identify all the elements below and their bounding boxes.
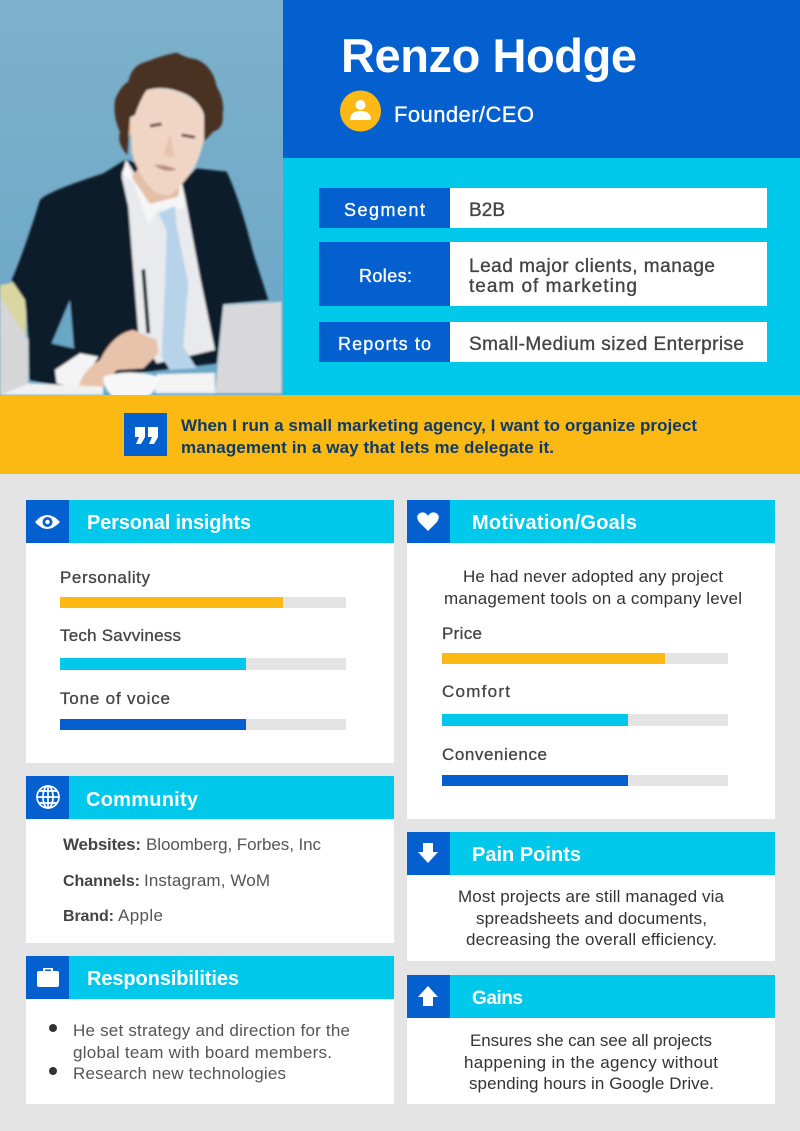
bar: personality [60,568,346,608]
panel: responsibilities [26,956,394,1104]
name: Renzo Hodge [341,29,637,82]
bulleted list: Research new technologies [73,1064,286,1083]
description [464,1031,718,1093]
text: channels: Channels: [63,873,140,890]
row: roles: Roles: [359,266,412,286]
row: reports to: Reports to [338,334,431,354]
row: roles: Lead major clients, manage [469,256,715,277]
panel: gains [407,975,775,1104]
text: channels [63,871,270,890]
icon: up arrow [418,986,438,1006]
quote band: management in a way that lets me delegate it. [181,438,554,457]
description [458,887,725,949]
bulleted list: global team with board members. [73,1043,332,1062]
bulleted list: He set strategy and direction for the [73,1021,350,1040]
icon: globe [37,786,59,808]
panel: community [26,776,394,943]
text: brand: Brand: [63,908,114,925]
bar: tech savviness [60,626,346,670]
panel: profile details [283,158,800,395]
row: segment: B2B [469,200,505,221]
bar: personality: Personality [60,568,150,587]
description: Most projects are still managed via [458,887,725,906]
panel: pain points [407,832,775,961]
heading: Responsibilities [87,968,239,990]
heading: Gains [472,988,523,1009]
icon: person badge [340,90,381,132]
description: decreasing the overall efficiency. [466,930,717,949]
bar: tone of voice [60,689,346,730]
panel: personal insights [26,500,394,763]
text: websites: Bloomberg, Forbes, Inc [146,835,322,854]
bulleted list [49,1021,350,1083]
description: spreadsheets and documents, [476,909,707,928]
bar: convenience: Convenience [442,745,547,764]
bar: price [442,624,728,664]
icon: briefcase [37,968,59,987]
row: segment: Segment [344,200,425,220]
text: websites: Websites: [63,835,141,854]
bar: price: Price [442,624,482,643]
heading: Motivation/Goals [472,512,637,534]
text: brand: Apple [118,906,163,925]
role: Founder/CEO [394,102,534,127]
icon: quotation marks [124,413,167,456]
icon: heart [417,512,439,531]
row: roles [319,242,767,306]
bar: convenience [442,745,728,786]
bar: tech savviness: Tech Savviness [60,626,181,645]
heading: Community [86,789,199,811]
icon: eye [35,515,60,529]
bar: tone of voice: Tone of voice [60,689,170,708]
icon: down arrow [418,843,438,863]
row: reports to [319,322,767,362]
panel: motivation and goals [407,500,775,819]
description: Ensures she can see all projects [470,1031,712,1050]
heading: Personal insights [87,512,251,534]
bar: comfort [442,682,728,726]
description: spending hours in Google Drive. [469,1074,714,1093]
text: brand [63,906,163,925]
bar: comfort: Comfort [442,682,510,701]
text: websites [63,835,322,854]
header band: name and role [283,0,800,158]
row: roles: team of marketing [469,276,637,297]
row: segment [319,188,767,228]
heading: Pain Points [472,844,581,866]
quote text: When I run a small marketing agency, I want to organize project [181,416,697,435]
quote band [0,395,800,474]
description [444,567,742,608]
photo: man in suit at desk [0,0,283,397]
description: management tools on a company level [444,589,742,608]
row: reports to: Small-Medium sized Enterprise [469,334,744,355]
description: happening in the agency without [464,1053,718,1072]
description: He had never adopted any project [463,567,723,586]
text: channels: Instagram, WoM [144,871,270,890]
